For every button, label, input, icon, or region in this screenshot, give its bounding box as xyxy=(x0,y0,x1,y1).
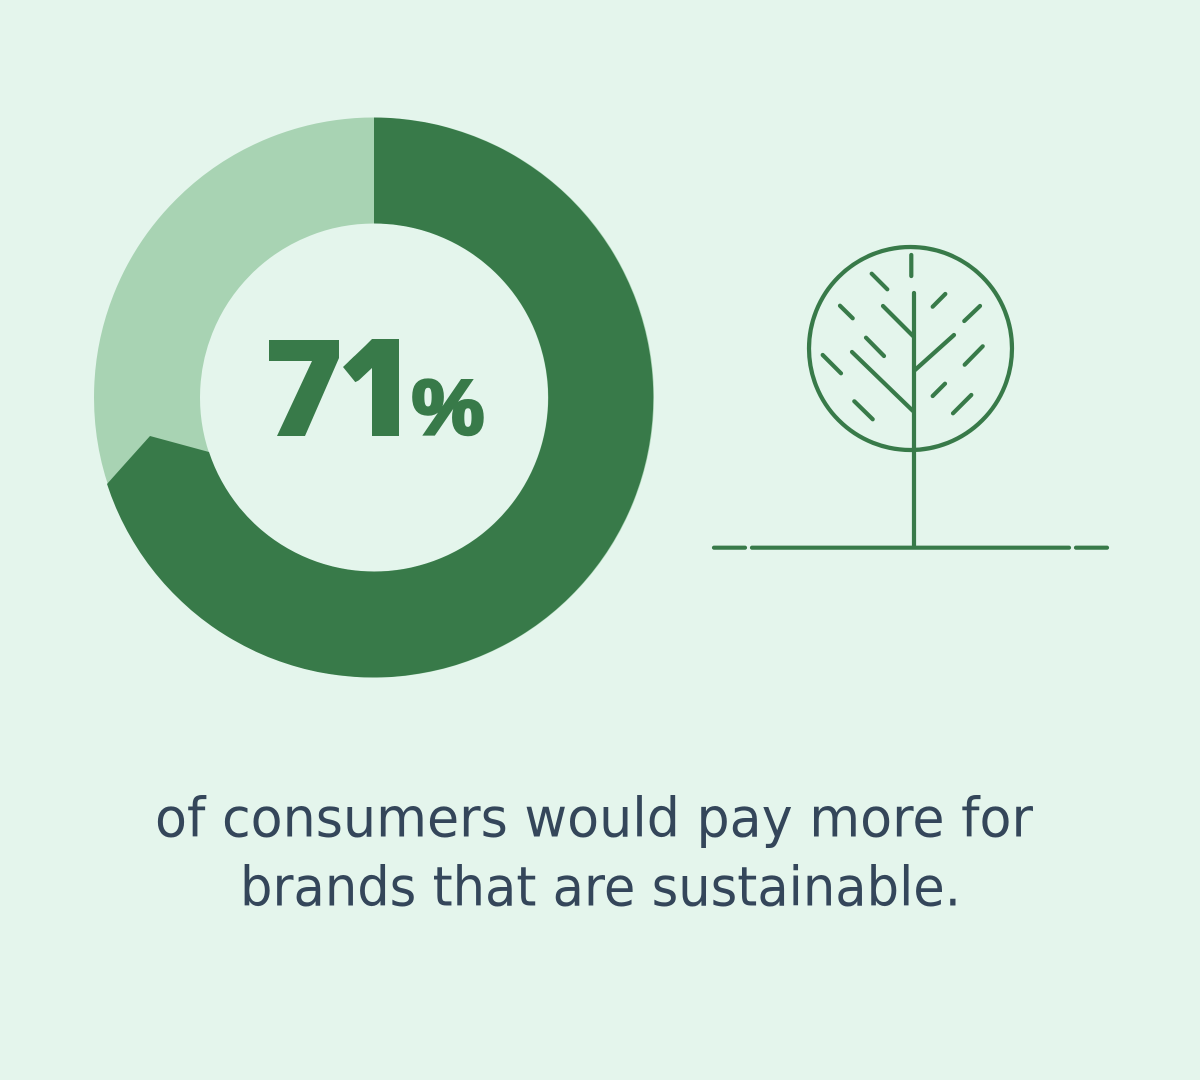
caption text: of consumers would pay more for xyxy=(155,786,1034,850)
statistic: 71% xyxy=(269,339,484,436)
statistic: 71%: 7 xyxy=(272,319,338,458)
caption text: brands that are sustainable. xyxy=(240,856,961,918)
donut chart: 71 percent xyxy=(107,118,653,677)
infographic canvas xyxy=(94,118,1110,906)
statistic: 71%: 1 xyxy=(338,319,425,458)
caption text xyxy=(155,786,1034,918)
icon: tree xyxy=(714,247,1107,548)
statistic: 71%: % xyxy=(412,365,484,451)
